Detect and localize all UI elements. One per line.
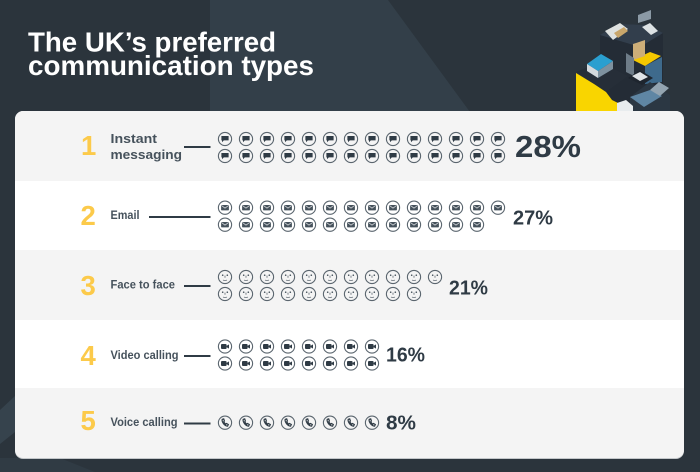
upper dark block: [600, 24, 663, 112]
row 2: email: 27%: [513, 208, 553, 230]
row 1: instant messaging: 28%: [515, 129, 581, 164]
row 1: instant messaging: messaging: [110, 147, 182, 162]
row 1: instant messaging: 1: [81, 130, 96, 161]
title: [28, 26, 314, 81]
row 2: email: 2: [80, 200, 96, 231]
row 4: video calling: 4: [80, 340, 96, 371]
row 3: face to face: 3: [80, 270, 96, 301]
row 4: video calling: [80, 340, 425, 371]
grey door: [626, 53, 634, 76]
row 5: voice calling: 5: [80, 405, 96, 436]
row 2: email: Email: [110, 210, 140, 222]
yellow block with dark top: [576, 62, 628, 92]
row 3: face to face: [80, 270, 488, 301]
white van: [617, 100, 633, 112]
row 5: voice calling: Voice calling: [110, 417, 178, 429]
dark platform with white goods: [628, 70, 653, 85]
stacked boxes: [633, 40, 645, 60]
row 4: video calling: 16%: [386, 344, 425, 366]
title: The UK’s preferred: [28, 26, 276, 58]
blue-grey side: [645, 57, 662, 84]
row 3: face to face: 21%: [449, 278, 488, 300]
blue house: [587, 54, 613, 71]
panel: ranking table: [15, 111, 684, 459]
row 3: face to face: Face to face: [110, 280, 175, 292]
monitor: [638, 10, 651, 23]
row 5: voice calling: 8%: [386, 412, 416, 434]
row 1: instant messaging: Instant: [110, 131, 158, 146]
row 2: email: [80, 200, 553, 231]
desk: [642, 23, 658, 35]
row 1: instant messaging: [81, 129, 581, 164]
title: communication types: [28, 50, 314, 81]
lower right block: [630, 82, 670, 112]
yellow platform: [633, 52, 661, 66]
row 5: voice calling: [80, 405, 416, 436]
illustration: isometric warehouse blocks: [576, 10, 670, 112]
row 4: video calling: Video calling: [110, 350, 178, 362]
pallets on upper block: [605, 23, 628, 40]
